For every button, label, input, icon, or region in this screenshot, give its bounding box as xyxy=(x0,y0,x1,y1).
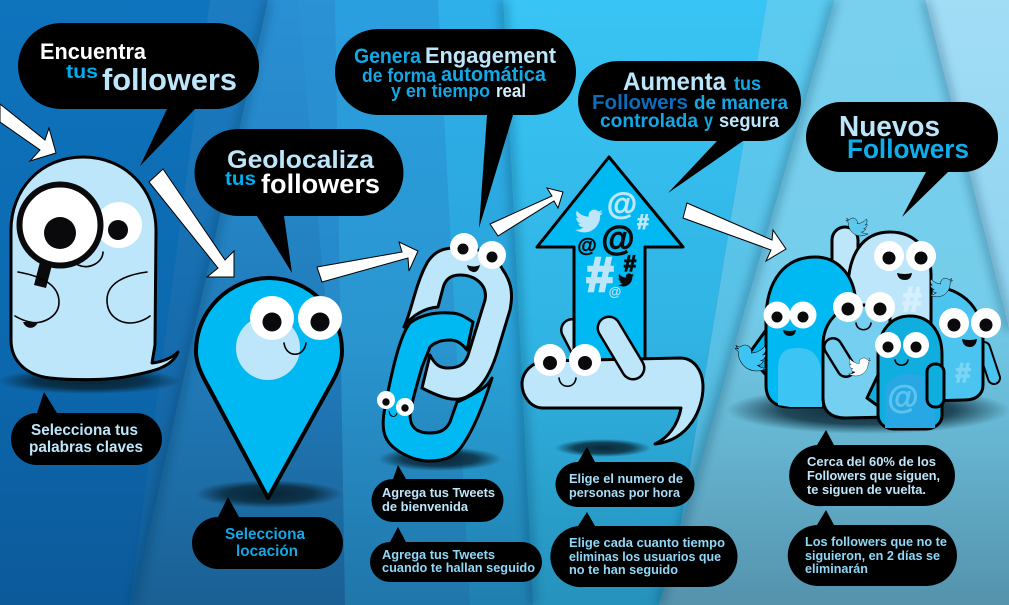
social icons in arrow: @ xyxy=(609,284,621,299)
ground shadow: arrow character xyxy=(555,439,651,457)
speech bubble: Geolocaliza tus followers: followers xyxy=(261,169,380,199)
speech bubble: Genera Engagement: Engagement xyxy=(425,43,557,68)
ground shadow: chain xyxy=(378,447,502,471)
caption: Agrega tus Tweets de bienvenida: de bienvenida xyxy=(382,499,469,514)
speech bubble: Genera Engagement: de forma xyxy=(362,66,436,87)
caption: Los followers que no te siguieron: Los followers que no te xyxy=(805,534,947,549)
follower: back with raised arm: # xyxy=(903,281,922,319)
caption: Agrega tus Tweets de bienvenida xyxy=(372,465,503,522)
speech bubble: Geolocaliza tus followers: tus xyxy=(225,169,256,190)
caption: Los followers que no te siguieron: eliminarán xyxy=(805,561,868,576)
caption: Selecciona tus palabras claves: Selecciona tus xyxy=(31,422,138,439)
speech bubble: Aumenta tus Followers: Followers xyxy=(592,92,688,114)
speech bubble: Nuevos Followers: Nuevos xyxy=(839,111,940,143)
caption: Agrega tus Tweets cuando te hallan seguido: Agrega tus Tweets xyxy=(382,547,495,562)
caption: Selecciona tus palabras claves xyxy=(11,392,162,465)
arrow: up arrow to followers xyxy=(683,203,786,261)
speech bubble: Encuentra tus followers: tus xyxy=(66,62,98,83)
caption: Los followers que no te siguieron xyxy=(788,510,957,586)
speech bubble: Aumenta tus Followers: segura xyxy=(719,111,779,132)
follower: center xyxy=(823,292,895,418)
follower: right: # xyxy=(955,358,971,388)
caption: Elige cada cuanto tiempo: no te han seguido xyxy=(569,562,678,577)
speech bubble: Genera Engagement: real xyxy=(496,81,526,101)
caption: Elige cada cuanto tiempo xyxy=(550,512,737,587)
speech bubble: Aumenta tus Followers: Aumenta xyxy=(623,68,727,96)
social icons in arrow: # xyxy=(624,251,636,276)
speech bubble: Genera Engagement: automática xyxy=(441,64,547,86)
character group: new followers xyxy=(735,218,1001,429)
ground shadow: searcher xyxy=(0,368,182,394)
speech bubble: Nuevos Followers xyxy=(806,102,998,217)
icon: bird right xyxy=(930,278,952,297)
speech bubble: Aumenta tus Followers: y xyxy=(704,111,713,132)
follower: left xyxy=(748,257,855,407)
ground shadow: followers group xyxy=(726,386,1009,434)
speech bubble: Aumenta tus Followers: tus xyxy=(734,74,761,95)
speech bubble: Geolocaliza tus followers: Geolocaliza xyxy=(227,146,375,174)
character: location pin xyxy=(196,278,342,498)
caption: Elige cada cuanto tiempo: eliminas los usuarios que xyxy=(569,549,721,564)
arrow: pin to chain xyxy=(317,242,418,282)
arrow: searcher to pin xyxy=(149,169,234,277)
caption: Elige el numero de personas por hora xyxy=(556,447,694,507)
speech bubble: Encuentra tus followers xyxy=(18,23,259,166)
follower: front xyxy=(867,316,944,429)
caption: Cerca del 60%: Followers que siguen, xyxy=(807,468,940,483)
character: chain links xyxy=(377,233,512,461)
caption: Elige el numero de personas por hora: Elige el numero de xyxy=(569,471,683,486)
follower: back with raised arm xyxy=(832,227,936,400)
social icons in arrow: # xyxy=(637,211,649,234)
caption: Cerca del 60%: Cerca del 60% de los xyxy=(807,454,936,469)
caption: Selecciona locación: locación xyxy=(236,543,298,560)
caption: Selecciona locación: Selecciona xyxy=(225,526,305,543)
icon: bird white xyxy=(848,358,870,376)
social icons in arrow: # xyxy=(587,249,613,302)
follower: right xyxy=(925,287,1001,401)
social icons in arrow: @ xyxy=(577,235,597,257)
caption: Cerca del 60% xyxy=(789,430,955,506)
social icons in arrow: @ xyxy=(607,186,637,221)
caption: Elige cada cuanto tiempo: Elige cada cuanto tiempo xyxy=(569,535,725,550)
speech bubble: Encuentra tus followers: Encuentra xyxy=(40,39,147,64)
caption: Los followers que no te siguieron: siguieron, en 2 días se xyxy=(805,548,940,563)
caption: Agrega tus Tweets cuando te hallan seguido: cuando te hallan seguido xyxy=(382,560,535,575)
speech bubble: Nuevos Followers: Followers xyxy=(847,134,969,164)
character: up arrow with speech-shaped body xyxy=(522,157,703,444)
social icons in arrow xyxy=(575,186,649,302)
caption: Selecciona locación xyxy=(192,497,343,569)
arrow: into searcher xyxy=(0,104,56,161)
ground shadow: pin xyxy=(195,480,343,508)
big up arrow xyxy=(537,157,683,362)
speech bubble: Genera Engagement: y en tiempo xyxy=(391,81,490,101)
social icons in arrow: @ xyxy=(601,220,635,258)
speech bubble: Genera Engagement xyxy=(335,29,576,228)
speech bubble: Aumenta tus Followers: de manera xyxy=(694,93,788,114)
icon: bird top xyxy=(846,218,868,236)
speech bubble: Aumenta tus Followers: controlada xyxy=(600,111,698,132)
caption: Elige el numero de personas por hora: personas por hora xyxy=(569,485,681,500)
caption: Agrega tus Tweets de bienvenida: Agrega tus Tweets xyxy=(382,485,495,500)
caption: Cerca del 60%: te siguen de vuelta. xyxy=(807,482,926,497)
speech bubble: Genera Engagement: Genera xyxy=(354,45,421,68)
follower: front: @ xyxy=(887,379,919,415)
speech bubble: Aumenta tus Followers xyxy=(578,61,801,193)
caption: Selecciona tus palabras claves: palabras claves xyxy=(29,439,143,456)
speech bubble: Encuentra tus followers: followers xyxy=(102,62,237,97)
speech bubble: Geolocaliza tus followers xyxy=(195,129,403,273)
arrow: chain to up arrow xyxy=(490,188,563,236)
caption: Agrega tus Tweets cuando te hallan seguido xyxy=(370,527,542,582)
icon: bird left xyxy=(735,345,767,371)
character: searcher with magnifier xyxy=(11,157,178,380)
